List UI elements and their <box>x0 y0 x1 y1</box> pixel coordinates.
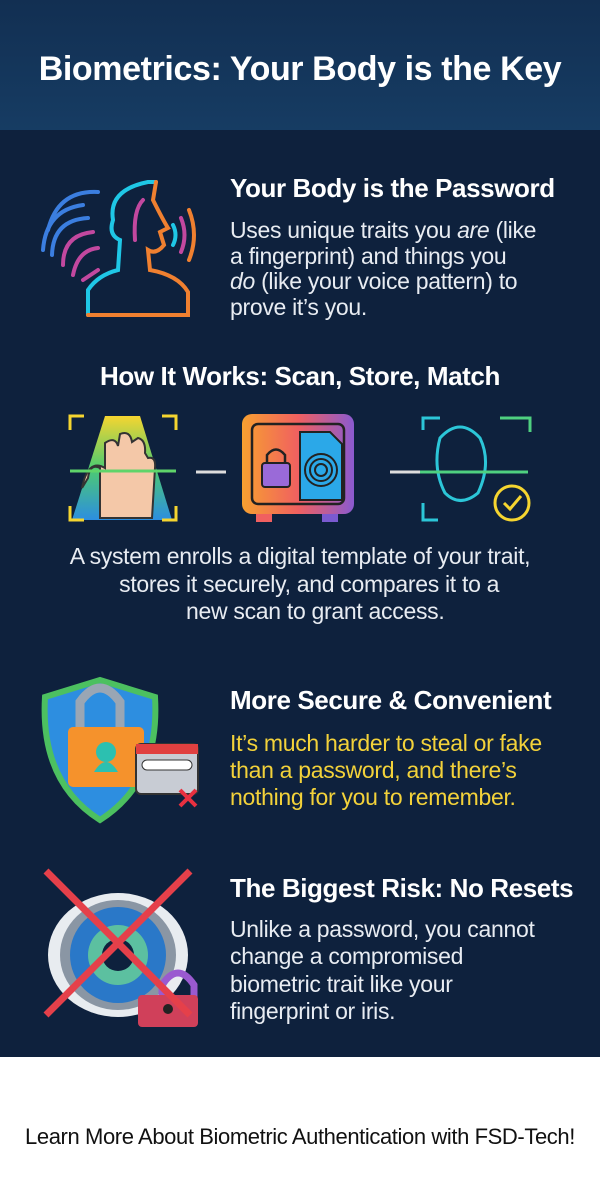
section 3 text <box>230 730 542 810</box>
section 3 text: It’s much harder to steal or fake <box>230 730 542 756</box>
section 1 heading: Your Body is the Password <box>230 173 555 203</box>
main dark panel <box>0 130 600 1057</box>
section 1 text: Uses unique traits you are (like <box>230 217 536 243</box>
section 4 text: Unlike a password, you cannot <box>230 916 535 942</box>
section 3 text: nothing for you to remember. <box>230 784 516 810</box>
icon: shield lock <box>42 676 199 824</box>
section 3 heading: More Secure & Convenient <box>230 685 551 715</box>
section 1 text: do (like your voice pattern) to <box>230 268 517 294</box>
section 2 text: stores it securely, and compares it to a <box>119 570 499 596</box>
section 2 text: A system enrolls a digital template of your trait, <box>70 543 530 569</box>
section 4 text: biometric trait like your <box>230 971 453 997</box>
section 1 text <box>230 217 536 320</box>
process icons row <box>68 414 532 522</box>
icon: hand scan <box>70 416 176 520</box>
icon: safe <box>242 414 354 522</box>
section 4 text: fingerprint or iris. <box>230 998 395 1024</box>
section 4 text: change a compromised <box>230 943 463 969</box>
section 4 heading: The Biggest Risk: No Resets <box>230 873 573 903</box>
title: Biometrics: Your Body is the Key <box>39 50 561 88</box>
section 2 text <box>70 543 530 624</box>
section 4 text <box>230 916 535 1024</box>
footer text: Learn More About Biometric Authentication with FSD-Tech! <box>25 1124 575 1149</box>
section 1 text: prove it’s you. <box>230 294 367 320</box>
section 1 text: a fingerprint) and things you <box>230 242 506 268</box>
icon: person with fingerprint and voice <box>41 180 196 317</box>
icon: face match <box>420 418 530 520</box>
icon: crossed eye with lock <box>44 868 198 1027</box>
header band <box>0 0 600 130</box>
section 2 text: new scan to grant access. <box>186 598 444 624</box>
section 3 text: than a password, and there’s <box>230 757 517 783</box>
section 2 heading: How It Works: Scan, Store, Match <box>100 361 500 391</box>
